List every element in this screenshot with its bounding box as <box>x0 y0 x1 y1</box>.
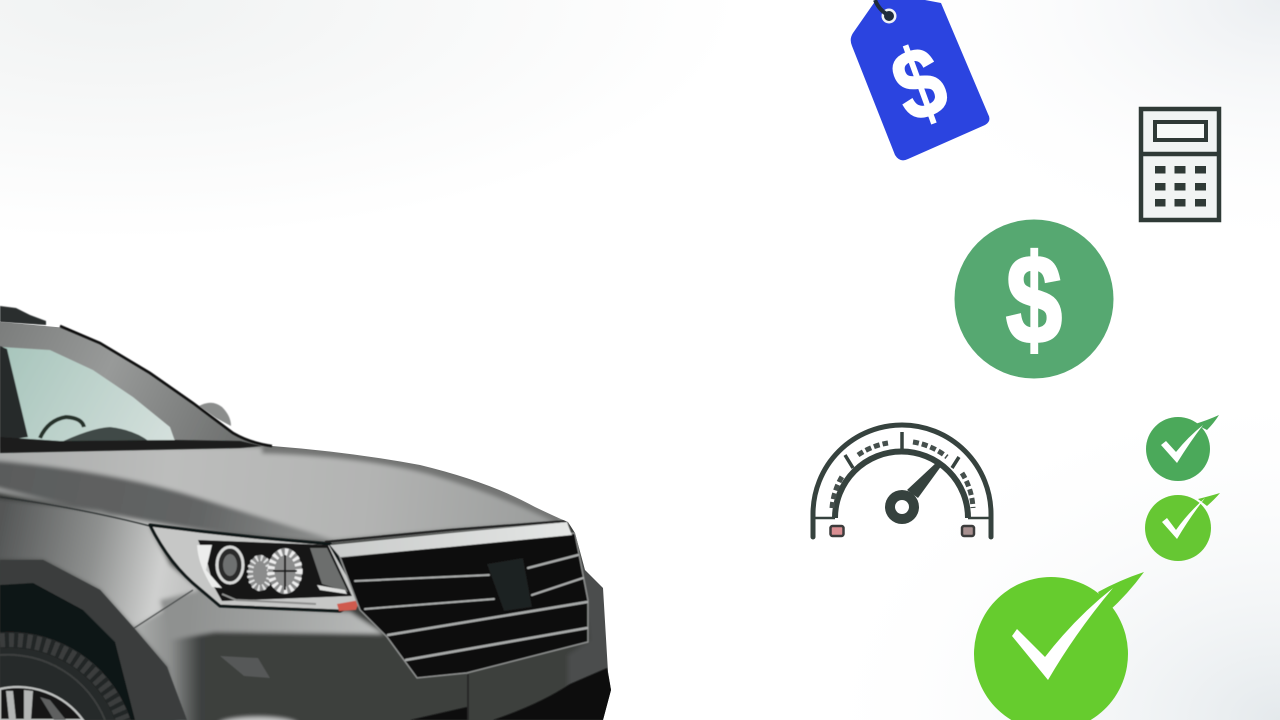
icon: dark green check <box>1146 415 1219 481</box>
icon: blue price tag <box>851 0 989 160</box>
roof rack <box>0 306 46 325</box>
icon: speedometer gauge <box>813 425 991 537</box>
grille bars <box>355 555 587 660</box>
chrome strip <box>330 522 572 557</box>
hood <box>0 447 580 541</box>
cowl <box>0 437 262 453</box>
steering wheel and dash <box>40 417 150 445</box>
hood shadow line <box>325 521 567 542</box>
icon: large green check <box>974 572 1144 720</box>
soft shading layer <box>0 300 630 720</box>
car: grey SUV front <box>0 300 630 720</box>
crisp detail layer <box>0 346 612 720</box>
hood top edge shade <box>262 449 560 520</box>
plate seam <box>467 674 469 720</box>
tag dollar sign: $ <box>878 22 960 144</box>
roof and pillar <box>0 315 270 452</box>
grille <box>340 533 588 678</box>
car body paint <box>0 300 630 720</box>
panel seam <box>134 589 194 629</box>
icon: green dollar coin: $ <box>1006 230 1062 371</box>
roof edge line <box>60 326 272 446</box>
bumper side <box>568 564 608 684</box>
lower bumper <box>493 668 612 720</box>
grille emblem <box>487 558 532 611</box>
icon: light green check <box>1145 493 1220 561</box>
hood crease <box>0 460 335 540</box>
side mirror <box>199 403 231 426</box>
bumper band <box>160 590 384 640</box>
gauge needle <box>885 462 942 524</box>
interior pillar <box>0 346 28 441</box>
headlight <box>150 525 362 611</box>
gauge end badges <box>830 526 844 536</box>
icon: green dollar coin <box>954 220 1114 378</box>
lower fender <box>133 614 198 720</box>
wheel well <box>0 583 135 720</box>
bumper highlight <box>218 717 298 720</box>
wheel <box>0 632 131 720</box>
calculator display <box>1155 122 1206 140</box>
calculator keys <box>1155 166 1206 206</box>
fender crease line <box>0 497 150 526</box>
tag hole <box>882 8 896 24</box>
icon: calculator <box>1141 109 1219 220</box>
fender <box>0 498 200 627</box>
fog slit <box>220 656 270 678</box>
wheel arch trim <box>0 560 187 720</box>
gauge scale marks <box>832 442 973 508</box>
windshield glass <box>3 347 175 441</box>
